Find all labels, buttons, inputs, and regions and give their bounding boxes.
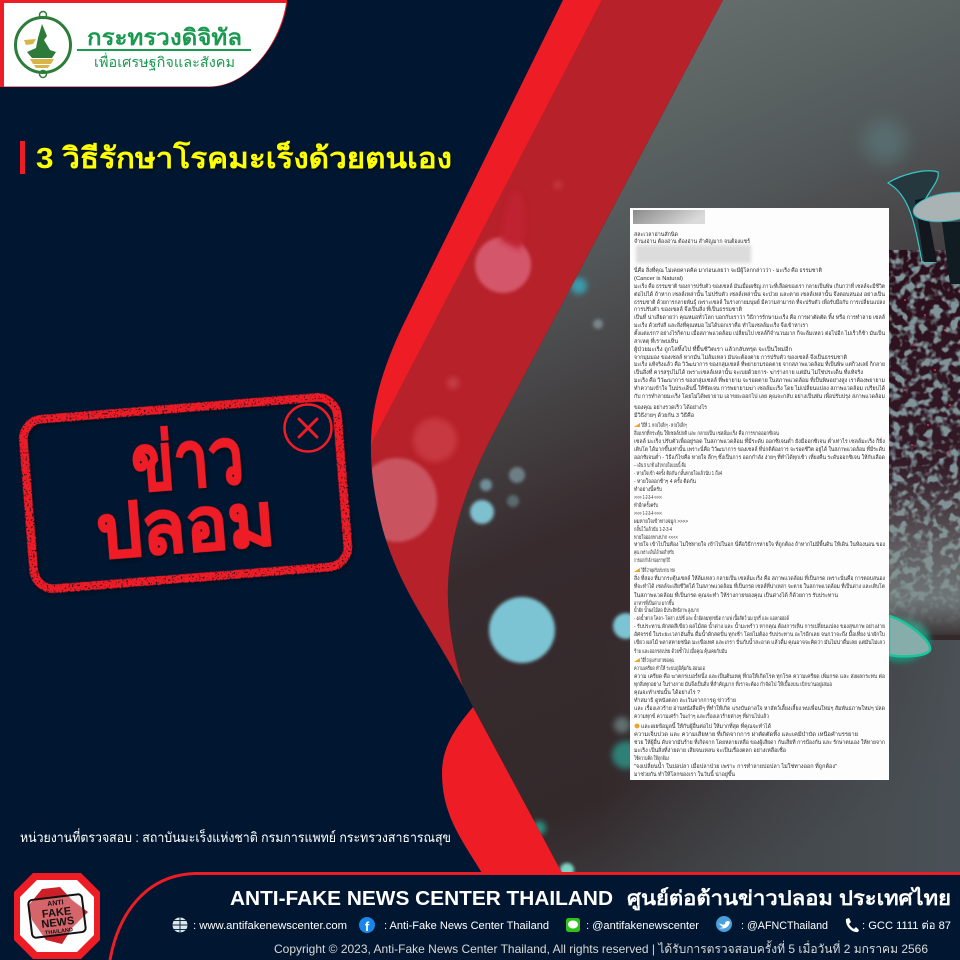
post text: สิ่ง ที่สอง ที่มากระตุ้นเซลล์ ให้ล้มเหลว กลายเป็น เซลล์มะเร็ง คือ สภาพแวดล้อม ที่เป็นกรด เพราะนั่นคือ การตอบสนอง (633, 574, 885, 582)
post text: การปรับตัว ของเซลล์ จึงเป็นสิ่ง ที่เป็นธรรมชาติ (634, 305, 742, 313)
nail 2 (911, 188, 960, 284)
post text: ร้าย และออกรสเปรย ด้วยซ้ำไป เมื่อคุณ คุ้นเคยกับมัน (634, 647, 727, 655)
title accent bar (20, 141, 25, 174)
ground texture right (889, 250, 960, 635)
post text: มะเร็ง ด้วยรังสี และสิ่งที่คุณหมอ ไม่ได้บอกเราคือ ทำไมเซลล์มะเร็ง จึงเข้าหาเรา (634, 321, 808, 329)
post text: มะเร็ง แท้จริงแล้ว คือ วิวัฒนาการ ของกลุ่มเซลล์ ที่พยายามรอดตาย จากสภาพแวดล้อม ที่เป็นพิษ แต่ก็วงเลย์ ก็กลาย (634, 360, 885, 368)
post text: สาเหตุ ที่เราพบเห็น (634, 337, 678, 345)
post text: ใช้ความคิด ให้ถูกต้อง (634, 755, 669, 762)
stamp frame (22, 396, 349, 590)
line account: : @antifakenewscenter (586, 920, 699, 932)
post text: ทำความเข้าใจ ในประเด็นนี้ ให้ชัดเจน การพยายามฆ่า เซลล์มะเร็ง โดย ไม่เปลี่ยนแปลง สภาพแวดล้อม เปรียบได้ (634, 384, 885, 392)
post text: ธรรมชาติ ด้วยการกลายพันธุ์ เพราะเซลล์ ในร่างกายมนุษย์ มีความสามารถ ที่จะปรับตัว เพื่อรับมือกับ การเปลี่ยนแปลง (634, 298, 885, 306)
icon: web globe (172, 918, 188, 932)
stamp: fake news (22, 396, 349, 590)
stamp text line 1: ข่าว (128, 411, 247, 508)
post text: อาหารที่เป็นด่าง มากขึ้น (634, 599, 674, 607)
post text: "จงเปลี่ยนน้ำ ในบ่อปลา เมื่อปลาป่วย เพราะ การทำลายบ่อปลา ไม่ใช่ทางออก ที่ถูกต้อง" (634, 762, 837, 770)
icon: twitter (716, 916, 732, 932)
panel: footer (110, 874, 960, 960)
icon: anti fake news stop sign: ANTI (47, 899, 64, 908)
post text: เซลล์ มะเร็ง ปรับตัวเพื่ออยู่รอด ในสภาพแวดล้อม ที่มีระดับ ออกซิเจนต่ำ ยังมีออกซิเจน ต่ำเท่าไร เซลล์มะเร็ง ก็ยิ่ง (634, 437, 885, 445)
icon: anti fake news stop sign: NEWS (41, 915, 75, 931)
nail 1 (888, 171, 938, 262)
post text: นี่คือ สิ่งที่คุณ ไม่เคยคาดคิด มาก่อนเลยว่า จะมีผู้โลกกล่าวว่า - มะเร็ง คือ ธรรมชาติ (634, 266, 822, 274)
icon: facebook (359, 917, 375, 934)
post text: เป็นสิ่งที่ ควรสรุปไม่ได้ เพราะเซลล์เหล่านั้น จะเบยด้วยการ- ฆ่าร่างกาย แต่มัน ไม่ใช่ประเด็น ที่แท้จริง (634, 368, 863, 376)
post text: เติบโต ได้มากขึ้นเท่านั้น เพราะนี่คือ วิวัฒนาการ ของเซลล์ ที่ปกติต้องการ จะรอดชีวิต อยู่ได้ ในสภาพแวดล้อม ที่มีระดับ (634, 445, 885, 453)
post text (633, 231, 885, 778)
post text: - งดน้ำตาล โคลา- โคล่า เปปซี่ และ น้ำอัดลมทุกชนิด กาแฟ เนื้อสัตว์ นม บุหรี่ และ แอลกอฮอล์ (634, 614, 789, 622)
post text: ผู้ป่วยมะเร็ง ถูกไล่ทิ้งไป ที่ยื้นชีวิตเรา แล้วกลับทรุด จะเป็นใหม่อีก (634, 345, 792, 353)
post text: หายใจออกทางปาก <<<< (634, 534, 678, 541)
post text: มะเร็ง เป็นสิ่งที่ง่ายดาย เสียจนเหลน จะเป็นเรื่องตลก อย่างเหลือเชื่อ (634, 746, 786, 754)
panel: red lobe bottom (442, 707, 562, 873)
post text: >>>> 1-2-3-4 <<<< (634, 495, 662, 501)
post text: มาช่วยกัน ทำให้โลกของเรา ในวันนี้ น่าอยู่ขึ้น (634, 770, 735, 778)
post text: และเผยข้อมูลนี้ ให้กับผู้อื่นต่อไป ให้มากที่สุด ที่คุณจะทำได้ (641, 722, 771, 730)
twitter account: : @AFNCThailand (741, 920, 828, 932)
post text: ทำสมาธิ ดูหนังตลก ละเว้นจากการดู ข่าวร้าย (634, 697, 736, 704)
post text: กลั้นไว้แล้วนับ 1-2-3-4 (634, 525, 672, 533)
post text: อัศจรรย์ ในระยะเวลาอันสั้น ดื่มน้ำผักสดปั่น ทุกเช้า โดยไม่ต้อง รับประทาน อะไรอีกเลย จนกว่าจะถึง มื้อเที่ยง น่าผักใบ (634, 630, 885, 638)
post text: ทำอย่างนี้ครับ (634, 485, 662, 493)
blurred sender details (636, 245, 751, 263)
post text: ในสภาพแวดล้อม ที่เป็นกรด คุณจะทำ ให้ร่างกายของคุณ เป็นด่างได้ ก็ด้วยการ รับประทาน (634, 591, 838, 599)
post text: ของคุณ อย่างรวดเร็ว ได้อย่างไร (634, 403, 707, 411)
post text: - หายใจออกช้าๆ 4 ครั้ง ติดกัน (634, 477, 696, 485)
teal nail tip (889, 616, 930, 656)
post text: เป็นที่ น่าเสียดายว่า คุณหมอทั่วโลก บอกกับเราว่า วิธีการรักษามะเร็ง คือ การผ่าตัดตัด ทิ้ง หรือ การทำลาย เซลล์ (634, 313, 885, 321)
post text: คุณจะทำเช่นนั้น ได้อย่างไร ? (634, 688, 700, 696)
post text: การออกกำลัง ของเราทุกวิธี (634, 557, 670, 564)
post text: น้ำผัก น้ำผลไม้สด มีประสิทธิภาพ สูงมาก (634, 606, 699, 614)
post text: (Cancer is Natural) (634, 276, 683, 282)
post text: สละเวลาอ่านสักนิด (634, 231, 678, 238)
logo wordmark: กระทรวงดิจิทัล (87, 25, 242, 50)
post text: วิธีที่ 1. หายใจลึกๆ - หายใจลึกๆ (640, 421, 687, 429)
post text: ต่อไปได้ ถ้าหาก เซลล์เหล่านั้น ไม่ปรับตัว เซลล์เหล่านั้น จะป่วย และตาย เซลล์เหล่านั้น จึงตอบสนอง อย่างเป็น (634, 290, 885, 298)
icon: facebook: f (365, 919, 370, 934)
post text: จากมุมมอง ของเซลล์ หากมัน ไม่ล้มเหลว มันจะต้องตาย การปรับตัว ของเซลล์ จึงเป็นธรรมชาติ (634, 353, 847, 361)
footer heading (230, 886, 951, 912)
post text: ความเจ็บปวด และ ความเสียหาย ที่เกิดจากการ ผ่าตัดตัดทิ้ง และเคมีบำบัด เหนือคำบรรยาย (634, 730, 858, 738)
panel: bright red band (371, 0, 602, 445)
post text: คุณ เพราะเดินได้ พอสำหรับ (634, 549, 674, 556)
icon: pointing hands (634, 423, 640, 728)
post text: มีวิธีง่ายๆ ด้วยกัน 3 วิธีคือ (634, 412, 694, 419)
post text: -- เดิน 5 นาที แล้วหายใจแบบนี้ คือ (634, 461, 686, 469)
post text: มะเร็ง คือ วิวัฒนาการ ของกลุ่มเซลล์ ที่พยายาม จะรอดตาย ในสภาพแวดล้อม ที่เป็นพิษอย่างสูง เราต้องพยายาม (634, 376, 885, 384)
post text: ช่วย ให้ผู้อื่น ดับจากมันร้าย ที่เกิดจาก โดยหลายเหลือ ของผู้เสียดา กันเสียที การป้องกัน และ รักษาตนเอง ให้หายจาก (634, 738, 885, 746)
icon: anti fake news stop sign (14, 873, 100, 959)
icon: ministry emblem (16, 12, 70, 78)
icon: anti fake news stop sign: THAILAND (45, 927, 73, 937)
post text: - หายใจเข้า 4ครั้ง ติดกัน กลั้นหายใจแล้วนับ 1 ถึง4 (634, 469, 722, 477)
post text: ผมหายใจเข้าทางจมูก >>>> (634, 518, 688, 525)
icon: phone (846, 918, 859, 932)
phone number: : GCC 1111 ต่อ 87 (862, 920, 951, 932)
post text: ความทุกข์ ความเศร้า ในเก่าๆ และเรื่องเลวร้ายต่างๆ ที่ผ่านไปแล้ว (634, 712, 769, 720)
icon: anti fake news stop sign: FAKE (41, 905, 72, 921)
post text: ตั้งแต่แรก? อย่างไรก็ตาม เมื่อสภาพแวดล้อม เปลี่ยนไป เซลล์ก็จำนวนมาก ก็จะล้มเหลว ต่อไปอีก ไม่เร็วก็ช้า มันเป็น (634, 329, 885, 337)
icon: line (566, 918, 580, 932)
post text: หายใจ เข้าไปในท้อง ไม่ใช่หายใจ เข้าไปในอก นี่คือวิธีการหายใจ ที่ถูกต้อง ถ้าหากไม่มีพื้นดิน ให้เดิน ในห้องนอน ของ (634, 540, 885, 548)
post text: สิ่งแรกที่กระตุ้น ให้เซลล์ปกติ และ กลายเป็น เซลล์มะเร็ง คือ การขาดออกซิเจน (634, 429, 779, 437)
post text: มะเร็ง คือ ธรรมชาติ ของการปรับตัว ของเซลล์ มันเมื่อเผชิญ ภาวะที่เลือดของเรา กลายเป็นพิษ เกินกว่าที่ เซลล์จะมีชีวิต (634, 282, 885, 290)
title: 3 วิธีรักษาโรคมะเร็งด้วยตนเอง (36, 140, 452, 175)
panel: photo background with bubbles and nails (440, 0, 960, 877)
post text: จำนงอ่าน ต้องอ่าน ต้องอ่าน สำคัญมาก จนต้องแชร์ (634, 237, 750, 245)
copyright line: Copyright © 2023, Anti-Fake News Center Thailand, All rights reserved | ได้รับการตรวจสอบครั้งที่ 5 เมื่อวันที่ 2 มกราคม 2566 (274, 940, 928, 956)
source text: หน่วยงานที่ตรวจสอบ : สถาบันมะเร็งแห่งชาติ กรมการแพทย์ กระทรวงสาธารณสุข (20, 828, 451, 846)
post text: ความเครียด ทำให้ ระบบภูมิคุ้มกัน อ่อนแอ (634, 665, 705, 672)
footer contact row (172, 916, 951, 934)
post text: - รับประทาน ผักสดสีเขียว ผลไม้สด น้ำด่าง และ น้ำมะพร้าว หากคุณ ต้องการเห็น การเปลี่ยนแปลง ของสุขภาพ อย่างง่าย (634, 622, 885, 630)
footer heading: ศูนย์ต่อต้านข่าวปลอม ประเทศไทย (627, 886, 951, 912)
post text: กับ การทำลายมะเร็ง โดยไม่ได้พยายาม เอาขยะออกไป เลย คุณจะกลับ อย่างเป็นพัน เพื่อปรับปรุง สภาพแวดล้อม (634, 392, 885, 400)
post text: ทำอีกครั้งครับ (634, 501, 658, 509)
post text: >>>> 1-2-3-4 <<<< (634, 511, 662, 517)
post text: เขียว ผลไม้ พลาสตายชนิด มะเขือเทศ และเกรา ปั่นกับน้ำสะอาด แล้วดื่ม คุณอาจจะคิดว่า มันไม่น่าดื่มเลย แต่มันไม่เลว (634, 638, 885, 646)
post text: ความ เครียด คือ ฆาตกรเบอร์หนึ่ง และเป็นต้นเหตุ ที่ก่อให้เกิดโรค ทุกโรค ความเครียด เพิ่มกรด และ ส่งผลกระทบ ต่อ (634, 672, 885, 680)
post text: และ เรื่องเลวร้าย อ่านหนังสือดีๆ ที่ทำให้เกิด แรงบันดาลใจ หาสัตว์เลี้ยงเลี้ยง พบเพื่อนใหม่ๆ สัมพันธภาพใหม่ๆ ปลด (634, 704, 885, 712)
stamp text line 2: ปลอม (94, 477, 278, 574)
logo tagline: เพื่อเศรษฐกิจและสังคม (94, 53, 235, 71)
panel: screenshot of the social media post (630, 208, 889, 780)
blurred sender name (633, 210, 705, 224)
post text: วิธีที่ 2 หยุดรับประทาน กรด (641, 566, 675, 574)
website: : www.antifakenewscenter.com (193, 920, 347, 932)
panel: translucent dark red band (357, 0, 730, 700)
post text: ออกซิเจนต่ำ - วิธีแก้ไขคือ หายใจ ลึกๆ ซึ่งเป็นการ ออกกำลัง ง่ายๆ ที่ทำได้ทุกเช้า เที่ยงคืน ระดับออกซิเจน ให้กับเลือด (634, 453, 885, 461)
panel: logo header (0, 0, 287, 87)
facebook name: : Anti-Fake News Center Thailand (384, 920, 549, 932)
post text: วิธีที่ 3 ดูแลร่างกายของคุณ (641, 656, 674, 664)
footer heading: ANTI-FAKE NEWS CENTER THAILAND (230, 888, 613, 910)
post text: ทุกสิ่งทุกอย่าง ในร่างกาย มันจึงเป็นสิ่ง ที่สำคัญมาก ที่เราจะต้อง กำจัดไป ให้เบื้องบน เบิกบานอยู่เสมอ (634, 680, 832, 688)
icon: stamp x mark (284, 404, 332, 452)
post text: ที่จะทำได้ เซลล์จะเสียชีวิตได้ ในสภาพแวดล้อม ที่เป็นกรด เซลล์ที่น่าเหล่า จะตาย ในสภาพแวดล้อม ที่เป็นด่าง และเติบโต (634, 582, 885, 590)
